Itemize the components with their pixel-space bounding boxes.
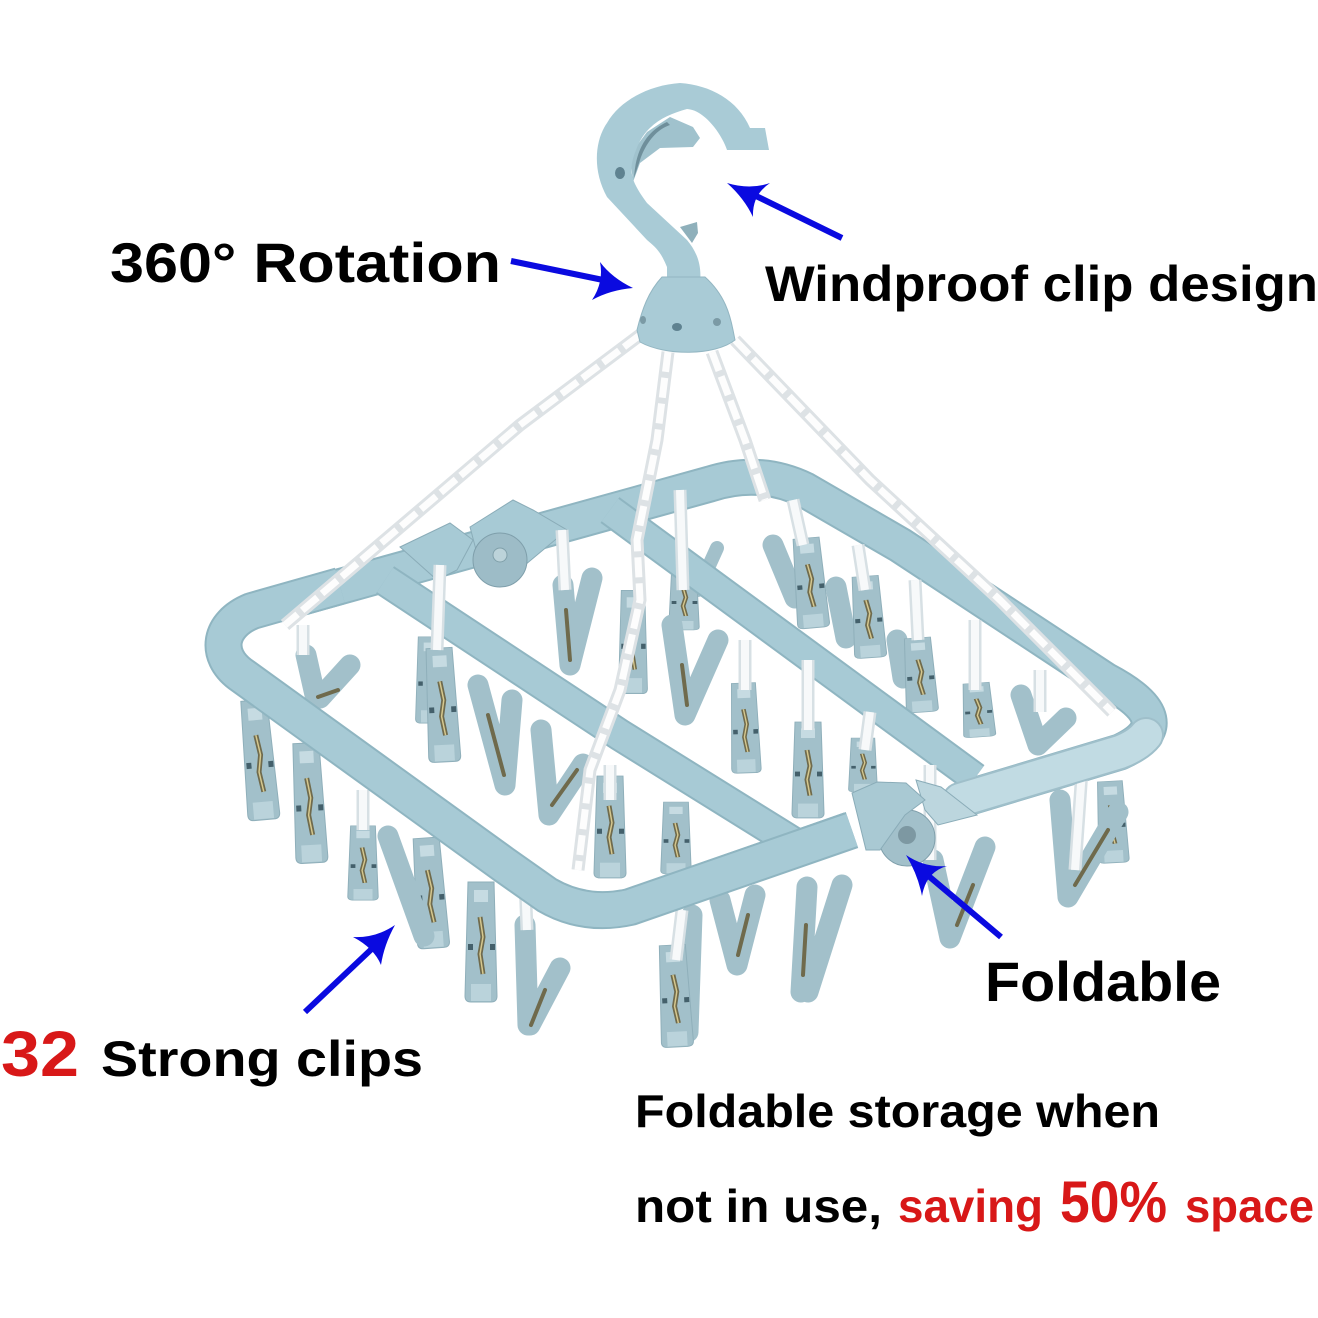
label: 32 strong clips: 32 — [1, 1018, 79, 1090]
label: windproof clip design: Windproof clip design — [765, 256, 1318, 312]
label: foldable: Foldable — [985, 950, 1221, 1013]
chains — [285, 335, 1112, 870]
text block: foldable storage: Foldable storage when — [635, 1085, 1160, 1137]
front hinge — [852, 780, 977, 866]
arrow: strong clips — [305, 925, 395, 1012]
arrow: foldable — [906, 855, 1001, 937]
clip straps — [303, 490, 1082, 960]
text block: foldable storage: 50% — [1060, 1170, 1167, 1235]
label: 32 strong clips: Strong clips — [101, 1031, 423, 1087]
crossbar: front — [385, 580, 805, 850]
icon: rotating hook and hub — [597, 83, 769, 352]
frame: front rail — [224, 586, 1146, 910]
text block: foldable storage: space — [1185, 1180, 1314, 1232]
frame: back rail — [224, 477, 1149, 910]
label: 360 rotation: 360° Rotation — [110, 231, 501, 294]
arrow: windproof clip — [727, 183, 842, 238]
back hinge — [400, 500, 567, 587]
text block: foldable storage — [635, 1085, 1314, 1235]
arrow: 360 rotation — [511, 261, 633, 300]
middle row of clips — [416, 625, 877, 818]
label: 32 strong clips — [1, 1018, 423, 1090]
text block: foldable storage: not in use, — [635, 1180, 882, 1232]
text block: foldable storage: saving — [898, 1180, 1043, 1232]
crossbar: rear — [610, 510, 975, 778]
back row of clips — [563, 537, 1066, 745]
front row of clips — [238, 655, 1129, 1048]
